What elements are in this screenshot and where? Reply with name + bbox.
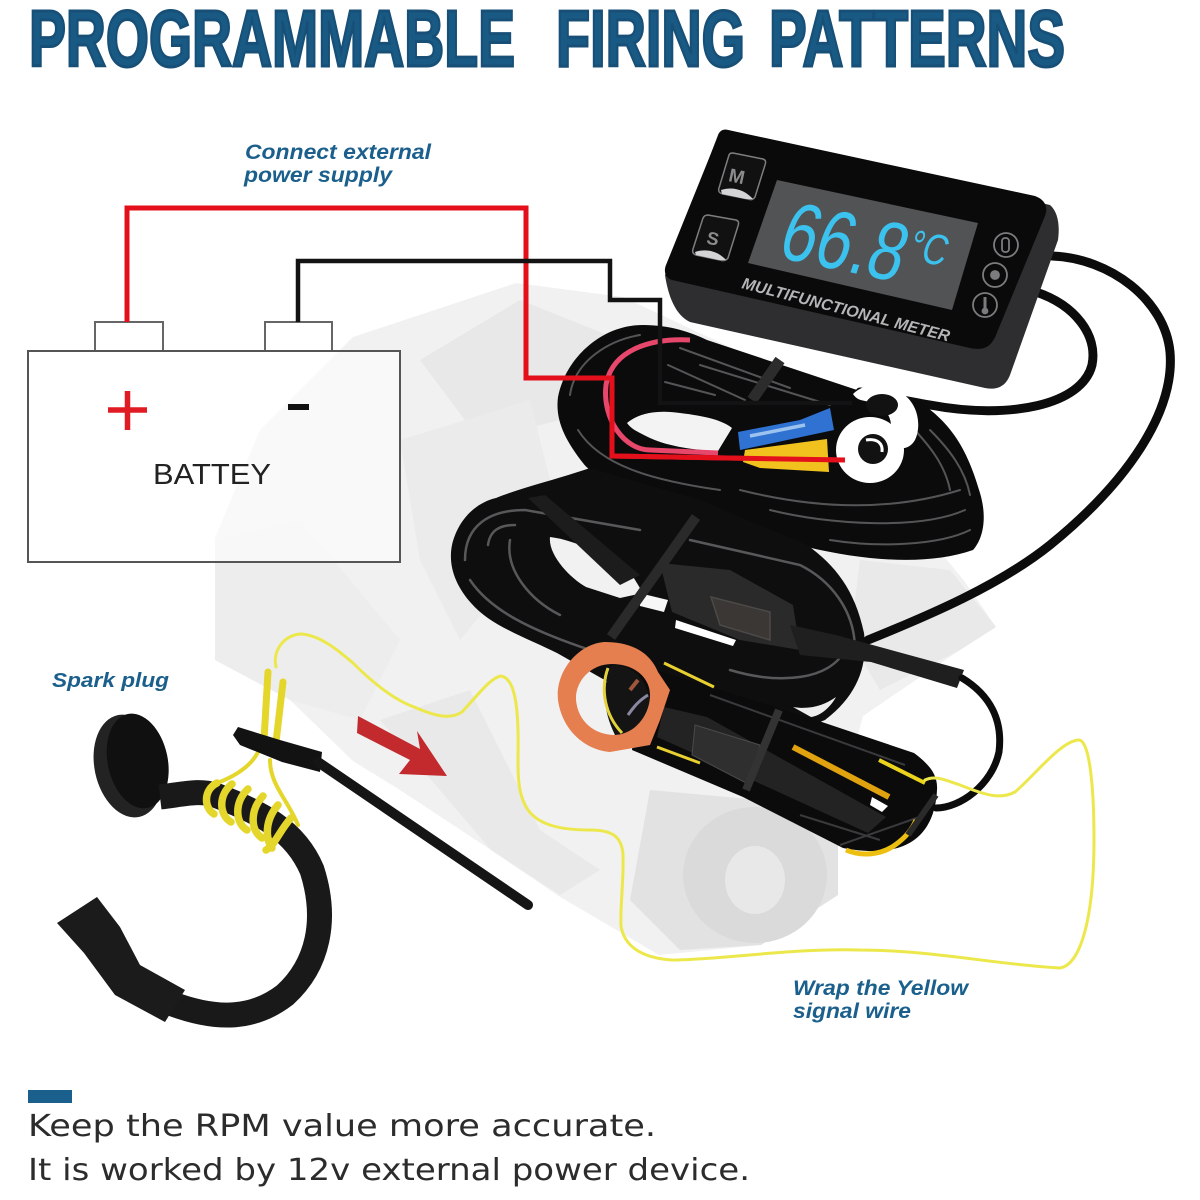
meter bbox=[665, 130, 1059, 389]
bundle highlights bbox=[710, 695, 925, 845]
ghost engine background bbox=[215, 283, 996, 955]
battery negative terminal bbox=[265, 322, 332, 351]
M button: M bbox=[727, 165, 747, 189]
meter label: MULTIFUNCTIONAL METER bbox=[740, 275, 952, 346]
lower coil highlights bbox=[465, 510, 855, 678]
red wire: battery positive to terminal bbox=[127, 208, 845, 460]
spark plug lead bbox=[57, 672, 528, 1022]
accent bar bbox=[28, 1090, 72, 1103]
pink inner wire bbox=[606, 340, 718, 453]
probe sleeve bbox=[657, 707, 886, 833]
lower coil mass bbox=[451, 468, 865, 730]
copper ring terminal bbox=[558, 642, 670, 752]
yellow connector bbox=[743, 439, 829, 472]
battery positive terminal bbox=[95, 322, 163, 351]
label: spark plug: Spark plug bbox=[52, 670, 169, 692]
lower ring hole bbox=[858, 434, 888, 464]
S button bbox=[693, 215, 739, 261]
meter screen bbox=[748, 180, 978, 310]
label: wrap the yellow signal wire bbox=[793, 977, 970, 1023]
yellow signal wire bbox=[275, 634, 1094, 968]
ring terminals and connectors bbox=[612, 385, 918, 483]
cable from meter: short lead bbox=[860, 292, 1093, 411]
bottom description: Keep the RPM value more accurate. bbox=[28, 1109, 656, 1144]
upper coil mass bbox=[557, 325, 984, 560]
white opening in upper coil bbox=[627, 412, 732, 451]
label: connect external power supply bbox=[243, 141, 432, 187]
label: wrap the yellow signal wire: signal wire bbox=[793, 1000, 911, 1023]
cable coil: lower bbox=[451, 468, 1000, 808]
minus sign bbox=[288, 404, 309, 410]
white opening in lower coil bbox=[550, 537, 643, 598]
S button: S bbox=[705, 228, 721, 250]
battery label: BATTEY bbox=[153, 459, 271, 491]
title bbox=[29, 0, 1065, 83]
bundle mass bbox=[632, 665, 937, 851]
tube sleeve on coil bbox=[528, 495, 640, 585]
bottom description: It is worked by 12v external power device. bbox=[28, 1153, 750, 1188]
cable from meter: long lead bbox=[868, 256, 1170, 640]
probe sleeve detail bbox=[692, 725, 760, 785]
sensor lead sleeve bbox=[790, 625, 964, 688]
crescent gap bbox=[793, 697, 836, 717]
yellow wire coil bbox=[206, 672, 298, 850]
zip tie on lower coil bbox=[611, 517, 696, 637]
red wire over connector bbox=[612, 456, 845, 460]
cable coil: upper bbox=[557, 325, 984, 560]
upper ring terminal bbox=[853, 385, 918, 448]
indicator icons bbox=[973, 233, 1018, 317]
spark plug cap bbox=[84, 707, 178, 824]
boot connector bbox=[57, 897, 185, 1022]
upper coil highlights bbox=[570, 335, 970, 544]
zip tie on upper coil bbox=[752, 360, 780, 400]
blue connector bbox=[738, 408, 834, 450]
white highlight in bundle bbox=[870, 797, 888, 812]
black wire: battery negative to terminal bbox=[298, 261, 852, 403]
digital readout: 66.8 bbox=[770, 185, 921, 299]
zip tie bbox=[233, 727, 528, 905]
M button bbox=[719, 153, 766, 200]
label: wrap the yellow signal wire: Wrap the Yellow bbox=[793, 977, 970, 1000]
digital readout: °C bbox=[902, 222, 955, 276]
plug connector bbox=[660, 563, 800, 650]
high tension cable bbox=[160, 793, 319, 1015]
red direction arrow bbox=[357, 716, 447, 776]
plus sign bbox=[108, 391, 147, 430]
loop of sensor lead bbox=[936, 678, 1000, 808]
zip tie at bundle tip bbox=[908, 795, 936, 835]
yellow wires in bundle bbox=[657, 663, 714, 763]
zip tie on bundle bbox=[746, 710, 779, 790]
battery bbox=[28, 322, 400, 562]
bottom description bbox=[28, 1109, 750, 1188]
wires inside ring bbox=[605, 665, 650, 735]
label: connect external power supply: Connect external bbox=[245, 141, 432, 164]
battery body bbox=[28, 351, 400, 562]
label: connect external power supply: power supply bbox=[243, 164, 393, 187]
meter face bbox=[665, 130, 1046, 349]
upper ring hole bbox=[866, 394, 898, 416]
blue connector highlight bbox=[750, 425, 805, 436]
probe bundle bbox=[632, 663, 937, 854]
meter body bbox=[665, 130, 1059, 389]
white slit bbox=[675, 620, 736, 646]
plug connector detail bbox=[711, 597, 770, 640]
lower ring terminal bbox=[836, 417, 904, 483]
small white opening bbox=[639, 593, 668, 612]
